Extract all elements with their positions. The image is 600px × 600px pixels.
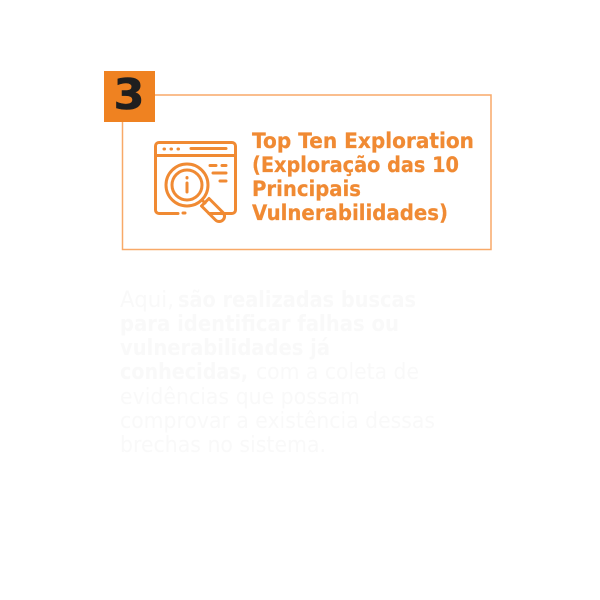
- heading: step title: [252, 129, 474, 225]
- heading: step title: Principais: [252, 177, 361, 201]
- text block: description: [120, 288, 435, 458]
- text block: description: para identificar falhas ou: [120, 312, 399, 337]
- heading: step title: Top Ten Exploration: [252, 129, 474, 153]
- text block: description: são realizadas buscas: [178, 288, 416, 313]
- panel: step card frame: [122, 95, 491, 250]
- text block: description: Aqui,: [120, 288, 174, 313]
- text block: description: vulnerabilidades já: [120, 336, 330, 361]
- text block: description: brechas no sistema.: [120, 433, 326, 458]
- heading: step title: Vulnerabilidades): [252, 201, 448, 225]
- text block: description: comprovar a existência dessas: [120, 409, 435, 434]
- heading: step title: (Exploração das 10: [252, 153, 459, 177]
- text block: description: com a coleta de: [256, 360, 419, 385]
- badge: step number 3: [104, 70, 155, 122]
- text block: description: conhecidas,: [120, 360, 248, 385]
- badge: step number 3: 3: [114, 70, 144, 119]
- icon: browser window with magnifying glass: [156, 142, 236, 222]
- text block: description: evidências que possam: [120, 385, 360, 410]
